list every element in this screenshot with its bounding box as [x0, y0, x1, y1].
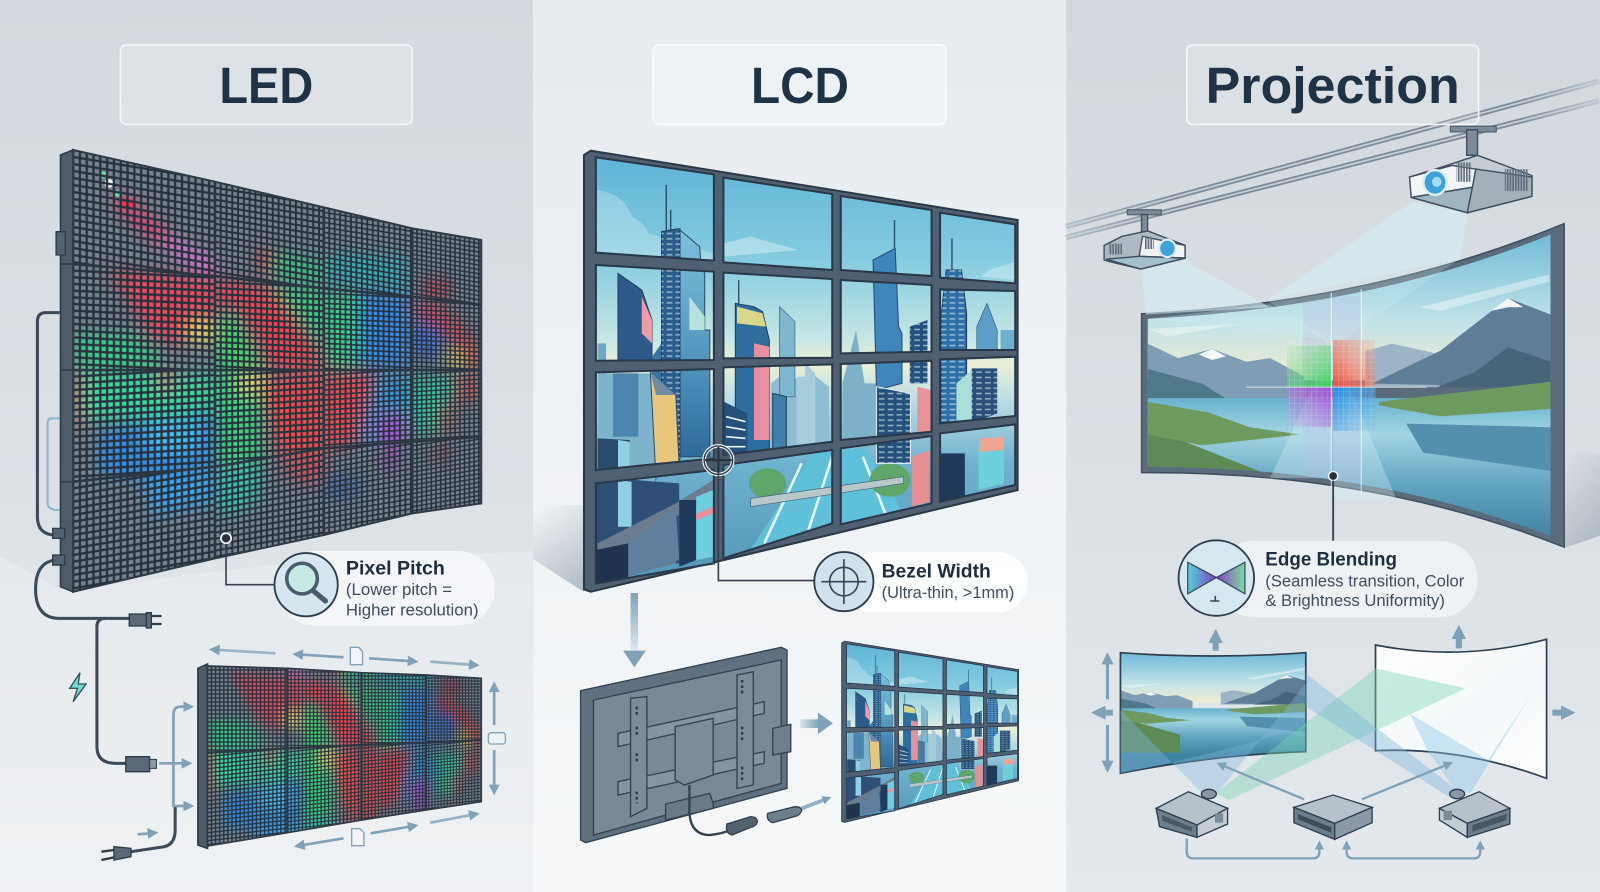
- bottom projector right: [1439, 789, 1510, 837]
- main LCD video wall with city scene: [584, 150, 1023, 597]
- small white calibration screen: [1376, 639, 1547, 778]
- ceiling rails: [1066, 81, 1599, 237]
- heading box: Projection: Projection: [1206, 57, 1460, 114]
- panel: Projection: [1066, 0, 1600, 892]
- bezel target magnifier: [704, 446, 733, 474]
- arrows: LED dimensions and signal: [138, 647, 505, 846]
- callout: bezel width: Bezel Width: [882, 561, 991, 583]
- small curved screen with landscape: [1120, 652, 1307, 774]
- panel background: LED: [0, 0, 533, 892]
- icon: crosshair: [814, 552, 873, 611]
- icon: lightning bolt: [70, 673, 86, 702]
- heading box: LCD: [653, 45, 946, 124]
- callout: pixel pitch: (Lower pitch =: [346, 580, 452, 599]
- callout: bezel width: [814, 552, 1028, 612]
- projector: ceiling large: [1410, 130, 1532, 213]
- leader line: pixel pitch: [221, 533, 278, 585]
- projector beams onto screen: [1142, 202, 1467, 498]
- callout: edge blending: & Brightness Uniformity): [1265, 591, 1445, 610]
- LCD panel rear with mounting bracket: [581, 647, 802, 843]
- arrows: projection signal and alignment: [1098, 632, 1568, 858]
- small LED wall installation: [197, 662, 482, 850]
- bottom controller: [1294, 795, 1372, 839]
- bottom projector left: [1156, 789, 1228, 837]
- callout: edge blending: Edge Blending: [1265, 548, 1397, 570]
- panel background: Projection: [1066, 0, 1600, 892]
- panel: LCD: [533, 0, 1066, 892]
- heading box: LCD: LCD: [751, 57, 849, 114]
- arrows: to assembled wall: [800, 713, 833, 808]
- projector: ceiling small: [1104, 215, 1185, 269]
- panel background: LCD: [533, 0, 1066, 892]
- edge blending zone: [1246, 289, 1427, 494]
- small assembled LCD wall: [842, 641, 1021, 824]
- arrow: down to mount: [623, 593, 646, 667]
- heading box: Projection: [1187, 45, 1479, 124]
- power cables and plugs: [97, 613, 175, 860]
- callout: edge blending: [1179, 540, 1478, 617]
- overlapping projection beams: [1120, 668, 1532, 800]
- callout: pixel pitch: Higher resolution): [346, 600, 479, 619]
- cables behind the LED wall: [36, 313, 131, 618]
- leader line: bezel width: [718, 476, 814, 581]
- callout: pixel pitch: [274, 551, 495, 626]
- leader line: edge blending: [1329, 471, 1338, 541]
- main LED video wall: [56, 150, 481, 592]
- panel: LED: [0, 0, 533, 892]
- icon: magnifier: [274, 553, 338, 616]
- callout: bezel width: (Ultra-thin, >1mm): [882, 583, 1014, 602]
- icon: blended beams: [1179, 540, 1254, 616]
- callout: edge blending: (Seamless transition, Color: [1265, 572, 1465, 591]
- heading box: LED: [120, 45, 412, 124]
- curved projection screen: [1140, 222, 1565, 548]
- callout: pixel pitch: Pixel Pitch: [346, 557, 445, 579]
- heading box: LED: LED: [219, 57, 313, 114]
